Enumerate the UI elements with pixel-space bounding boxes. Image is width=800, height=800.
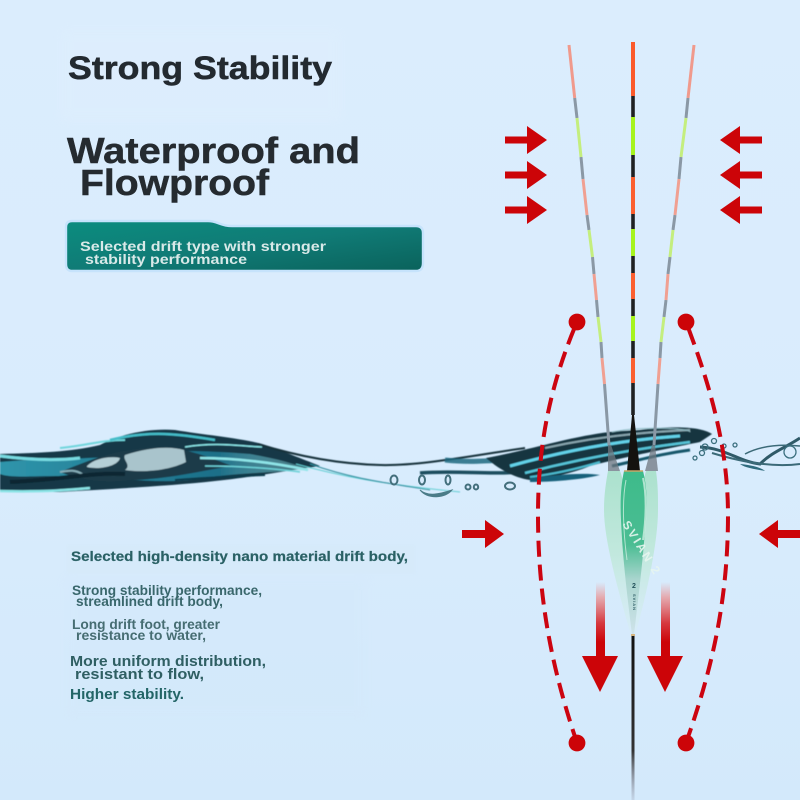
left drift float (569, 45, 631, 635)
water surface splash (0, 427, 800, 497)
center drift float: SVIAN 2 (619, 518, 663, 577)
left-pointing pressure arrows (720, 126, 762, 224)
heading: Waterproof and Flowproof (67, 130, 360, 203)
title: Strong Stability: Strong Stability (68, 50, 332, 86)
side arrow pointing left (759, 520, 800, 548)
center drift float: SVIAN (632, 594, 637, 610)
right-pointing pressure arrows (505, 126, 547, 224)
dashed left curve with dots (538, 314, 585, 751)
feature text block (70, 548, 408, 703)
feature text block: resistant to flow, (75, 666, 204, 683)
dashed right curve with dots (678, 314, 728, 751)
callout badge (66, 221, 423, 271)
feature text block: Strong stability performance, (72, 583, 262, 598)
downward arrow right (647, 582, 683, 692)
feature text block: Selected high-density nano material drift body, (71, 548, 408, 564)
feature text block: Long drift foot, greater (72, 617, 221, 632)
heading: Waterproof and Flowproof: Flowproof (80, 162, 270, 203)
downward arrow left (582, 582, 618, 692)
feature text block: Higher stability. (70, 686, 184, 703)
feature text block: resistance to water, (76, 628, 206, 643)
right drift float (635, 45, 694, 635)
feature text block: More uniform distribution, (70, 653, 266, 670)
heading: Waterproof and Flowproof: Waterproof and (67, 130, 360, 171)
center drift float (619, 42, 663, 800)
feature text block: streamlined drift body, (76, 594, 223, 609)
center drift float: 2 (632, 583, 636, 590)
callout badge: Selected drift type with stronger (80, 238, 327, 254)
callout badge: stability performance (85, 251, 247, 267)
side arrow pointing right (462, 520, 504, 548)
